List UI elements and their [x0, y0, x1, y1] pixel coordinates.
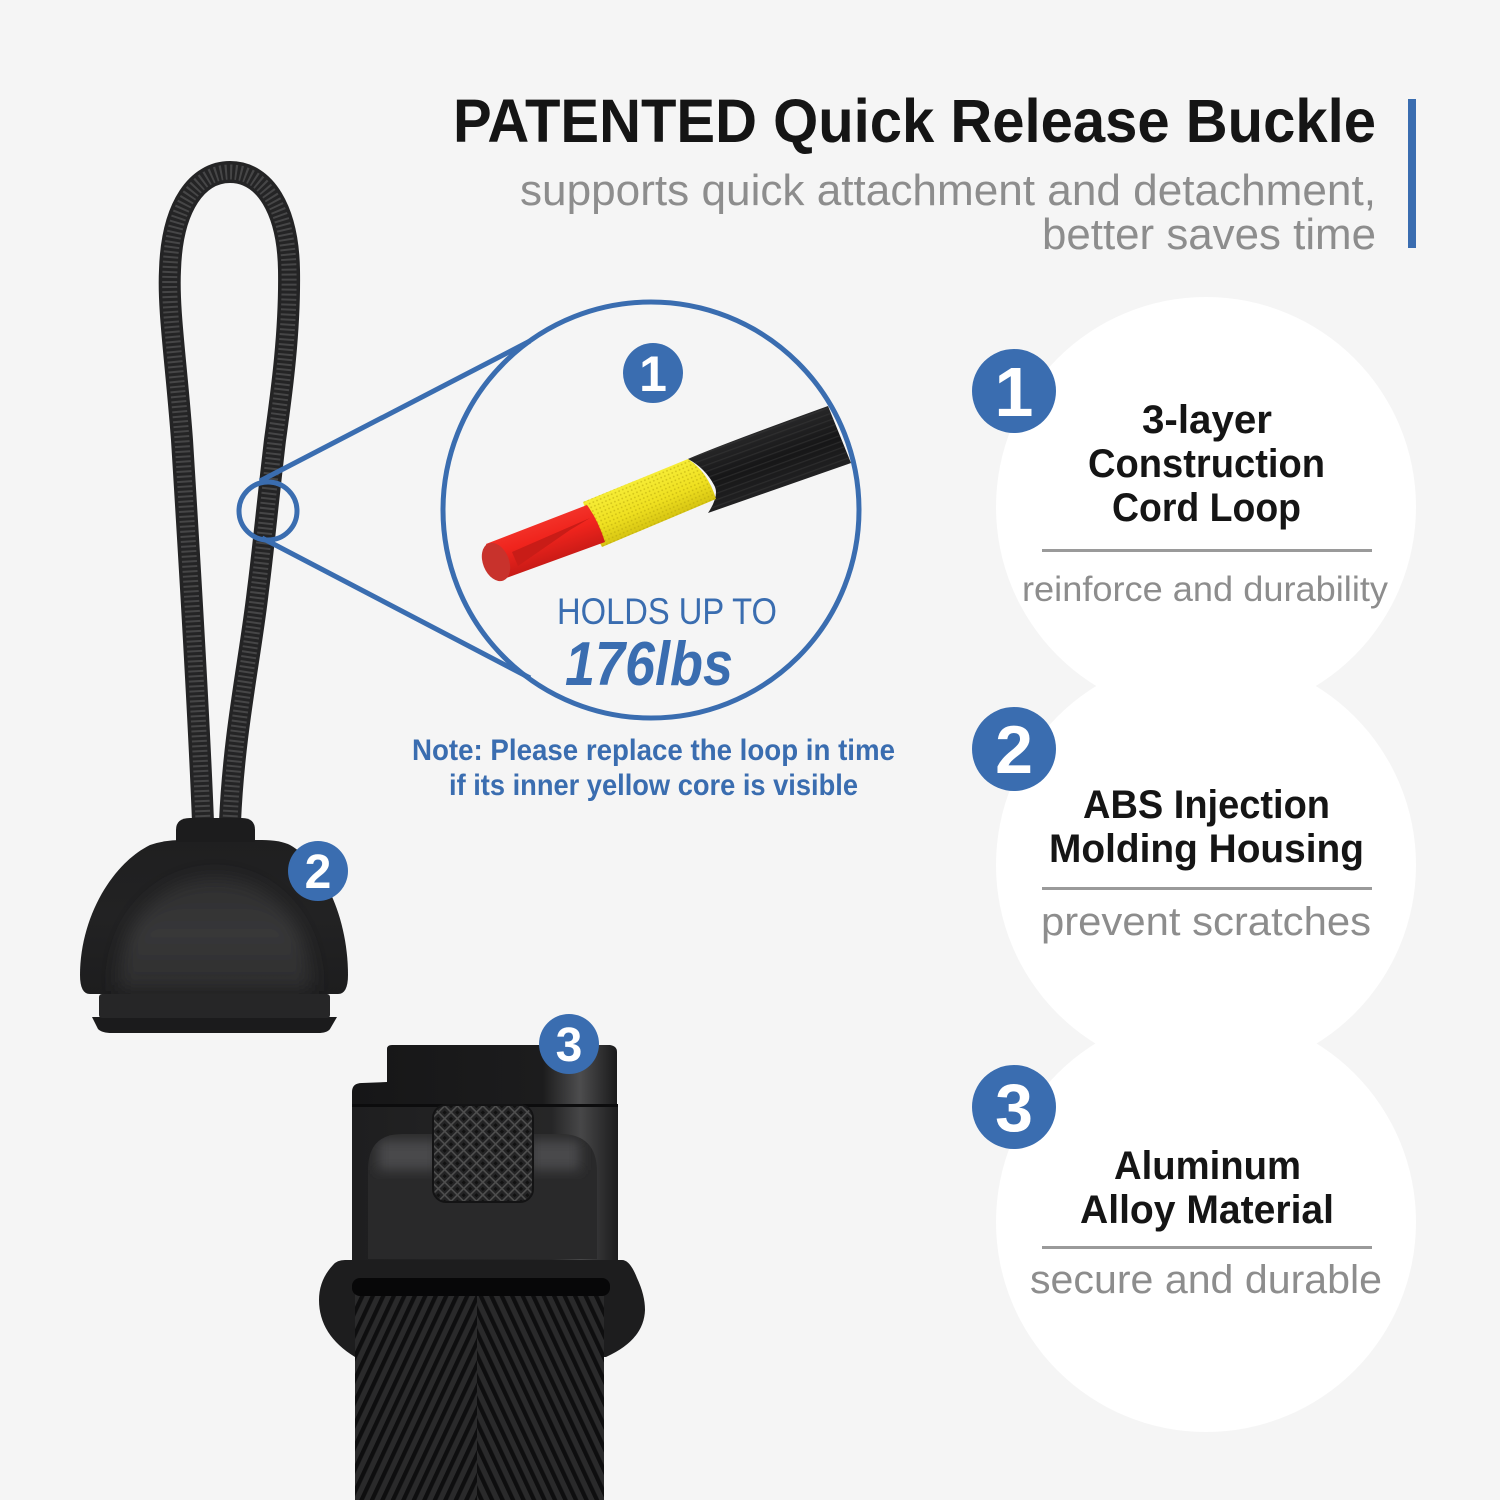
panel: feature 2 — [972, 707, 1372, 944]
feature 1 description: reinforce and durability — [1022, 570, 1389, 609]
feature 1 heading: 3-layer — [1142, 398, 1272, 442]
badge 3 on buckle: 3 — [556, 1019, 582, 1072]
product: cord loop — [170, 172, 289, 822]
text: holds up to: HOLDS UP TO — [557, 591, 777, 632]
note: Note: Please replace the loop in time — [412, 734, 895, 767]
strap loop top shadow — [352, 1278, 610, 1296]
strap webbing — [355, 1290, 604, 1500]
feature 1 heading — [1088, 398, 1325, 530]
badge 2 on housing — [288, 841, 348, 901]
badge 1 — [972, 349, 1056, 433]
note — [412, 734, 895, 802]
badge 2 on housing: 2 — [305, 846, 331, 899]
panel: white feature circles — [996, 297, 1416, 1432]
badge 2: 2 — [995, 712, 1033, 788]
text: 176lbs: 176lbs — [565, 630, 733, 699]
magnifier: callout lines and circles — [239, 302, 859, 718]
panel: feature 1 — [972, 349, 1389, 609]
badge 3: 3 — [995, 1070, 1033, 1146]
badge 3 — [972, 1065, 1056, 1149]
badge 1 on magnifier — [623, 343, 683, 403]
buckle inner plate — [368, 1134, 597, 1259]
feature 3 heading: Alloy Material — [1080, 1188, 1334, 1232]
subtitle — [520, 166, 1376, 259]
feature 1 heading: Construction — [1088, 442, 1325, 486]
icon: cord cross-section — [476, 406, 851, 585]
badge 3 on buckle — [539, 1014, 599, 1074]
feature 3 heading — [1080, 1144, 1334, 1232]
badge 1 on magnifier: 1 — [639, 346, 667, 402]
badge 2 — [972, 707, 1056, 791]
feature 2 heading — [1049, 783, 1364, 871]
knurled button — [433, 1105, 533, 1202]
feature 2 heading: Molding Housing — [1049, 827, 1364, 871]
black outer sheath — [688, 406, 851, 513]
feature 3 description: secure and durable — [1030, 1258, 1382, 1302]
panel: feature 3 — [972, 1065, 1382, 1302]
title: PATENTED Quick Release Buckle — [453, 87, 1376, 155]
note: if its inner yellow core is visible — [449, 769, 858, 802]
feature 2 heading: ABS Injection — [1083, 783, 1330, 827]
badge 1: 1 — [995, 353, 1033, 431]
feature 3 heading: Aluminum — [1114, 1144, 1301, 1188]
product: aluminum buckle and strap — [319, 1045, 645, 1500]
accent bar — [1408, 99, 1416, 248]
product: ABS buckle housing — [80, 818, 348, 1033]
feature 2 description: prevent scratches — [1041, 900, 1371, 944]
subtitle: better saves time — [1042, 210, 1376, 259]
red inner strand — [476, 505, 605, 585]
yellow core — [583, 459, 716, 547]
subtitle: supports quick attachment and detachment, — [520, 166, 1376, 215]
strap loop — [319, 1260, 645, 1357]
buckle body — [352, 1105, 618, 1260]
buckle top block — [352, 1045, 617, 1105]
feature 1 heading: Cord Loop — [1112, 486, 1301, 530]
